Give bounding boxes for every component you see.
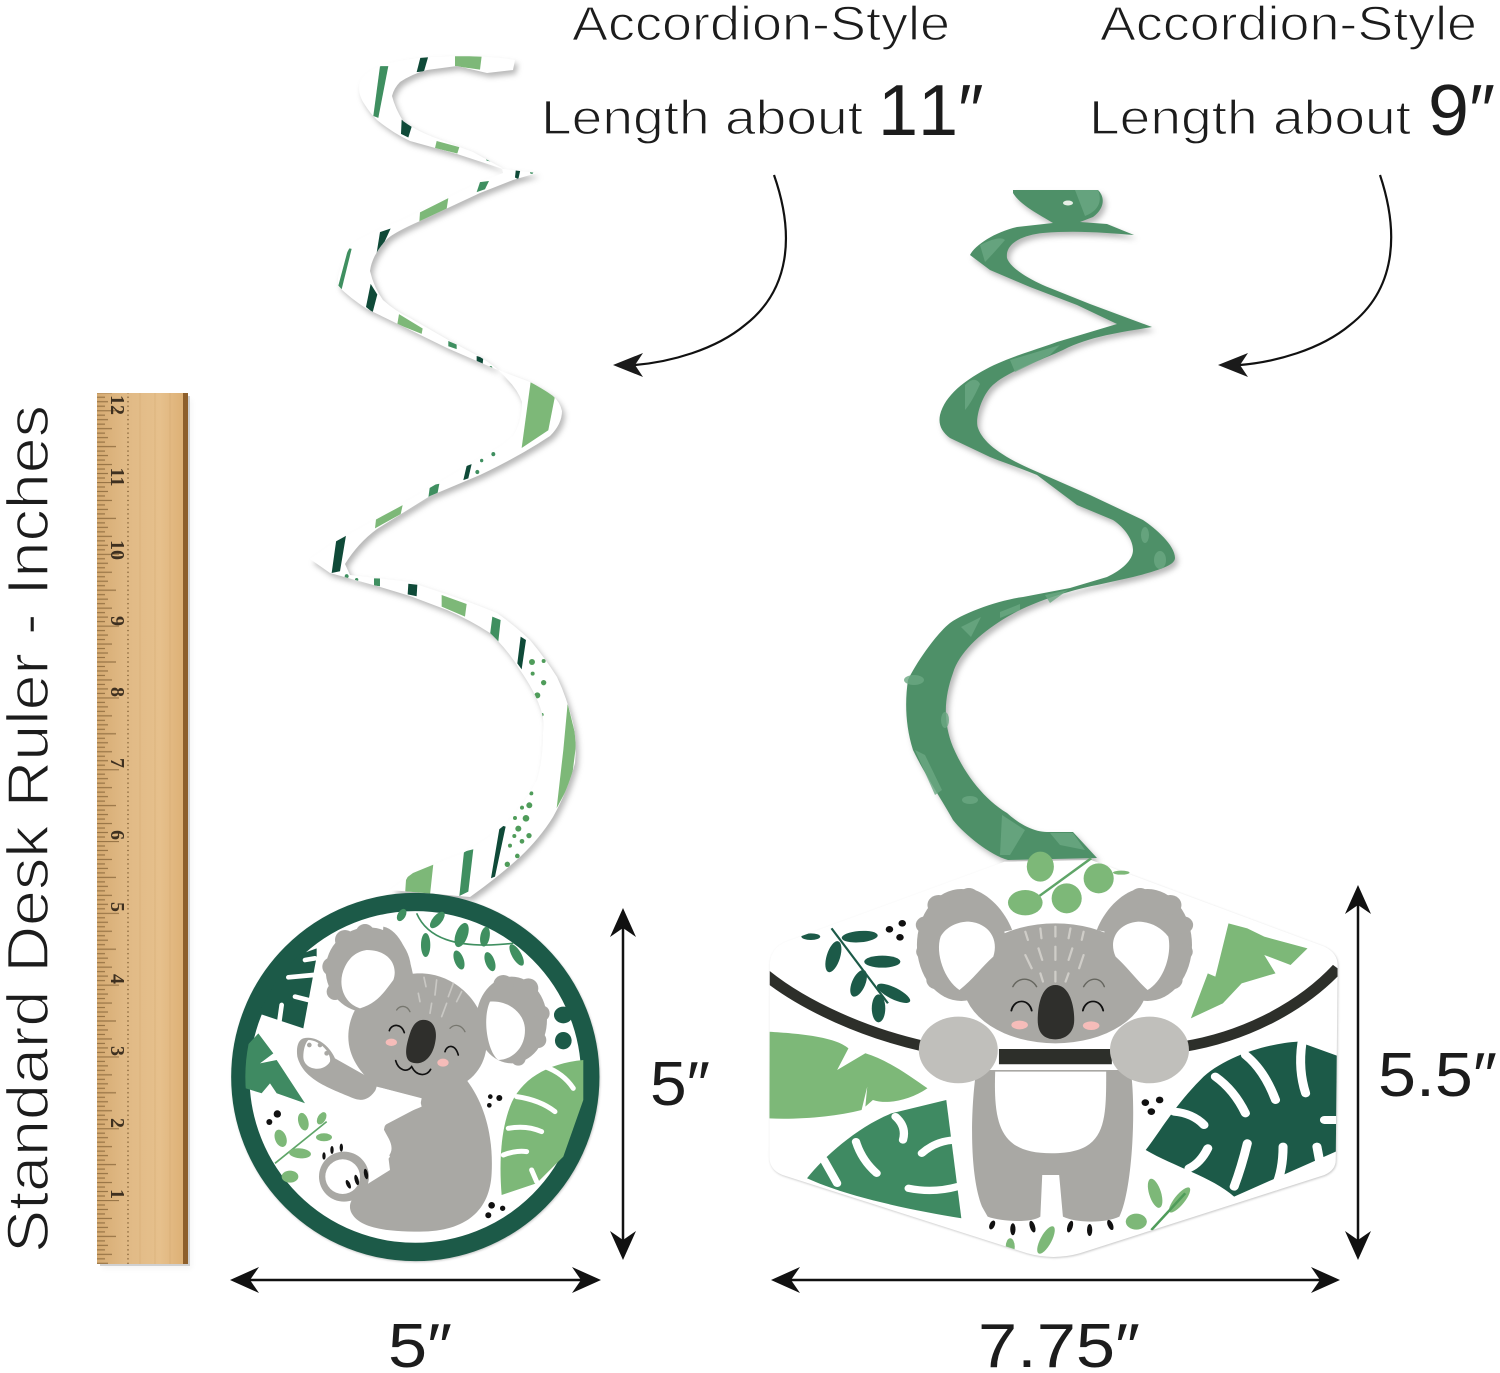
dimension arrow: round card height bbox=[610, 908, 636, 1260]
ruler inch numbers bbox=[106, 395, 128, 1199]
label: left swirl length: ″ bbox=[958, 71, 984, 151]
ruler inch numbers: 4 bbox=[106, 974, 128, 984]
koala: waving bbox=[297, 924, 550, 1232]
ruler inch numbers: 3 bbox=[106, 1046, 128, 1056]
dimension arrow: hexagon card height bbox=[1345, 885, 1371, 1260]
label: left swirl length: Length about bbox=[541, 92, 863, 145]
vine rope bbox=[766, 968, 1338, 1047]
dimension label: hexagon height: 5.5″ bbox=[1378, 1041, 1497, 1110]
dimension label: round height: 5″ bbox=[650, 1050, 710, 1119]
foliage bbox=[766, 920, 1340, 1256]
card disc bbox=[240, 902, 590, 1252]
ruler inch numbers: 12 bbox=[106, 395, 128, 415]
ruler inch numbers: 8 bbox=[106, 687, 128, 697]
label: right swirl length bbox=[1089, 0, 1495, 151]
wooden ruler bbox=[97, 393, 190, 1266]
ruler inch numbers: 6 bbox=[106, 830, 128, 840]
label: right swirl length: 9″ bbox=[1428, 71, 1495, 151]
dimension arrow: hexagon card width bbox=[771, 1267, 1340, 1293]
dimension arrow: round card width bbox=[230, 1267, 601, 1293]
koala face bbox=[386, 977, 465, 1075]
right swirl hanging card: hexagon koala bbox=[766, 852, 1340, 1257]
card hexagon bbox=[769, 860, 1338, 1257]
curved arrow: right swirl length bbox=[1218, 175, 1391, 377]
right swirl ribbon: solid green bbox=[904, 190, 1175, 860]
ruler inch numbers: 1 bbox=[106, 1189, 128, 1199]
claws bbox=[322, 1144, 369, 1189]
koala face bbox=[1011, 927, 1104, 1039]
label: left swirl length bbox=[541, 0, 984, 151]
curved arrow: left swirl length bbox=[613, 175, 786, 377]
left swirl ribbon: white with green stripes bbox=[310, 55, 577, 897]
label: left swirl length: 1 bbox=[918, 71, 958, 151]
claws bbox=[988, 1219, 1115, 1236]
label: left swirl length: 1 bbox=[878, 71, 918, 151]
koala: hanging bbox=[916, 888, 1193, 1222]
foliage bbox=[240, 907, 583, 1218]
ruler inch numbers: 7 bbox=[106, 758, 128, 768]
ruler inch numbers: 5 bbox=[106, 902, 128, 912]
ruler inch numbers: 11 bbox=[106, 468, 128, 486]
ruler inch numbers: 2 bbox=[106, 1118, 128, 1128]
ruler inch numbers: 10 bbox=[106, 540, 128, 560]
label: right swirl length: Length about bbox=[1089, 92, 1411, 145]
ruler inch numbers: 9 bbox=[106, 616, 128, 626]
top sprig bbox=[1008, 852, 1130, 915]
left swirl hanging card: round koala bbox=[240, 902, 590, 1252]
